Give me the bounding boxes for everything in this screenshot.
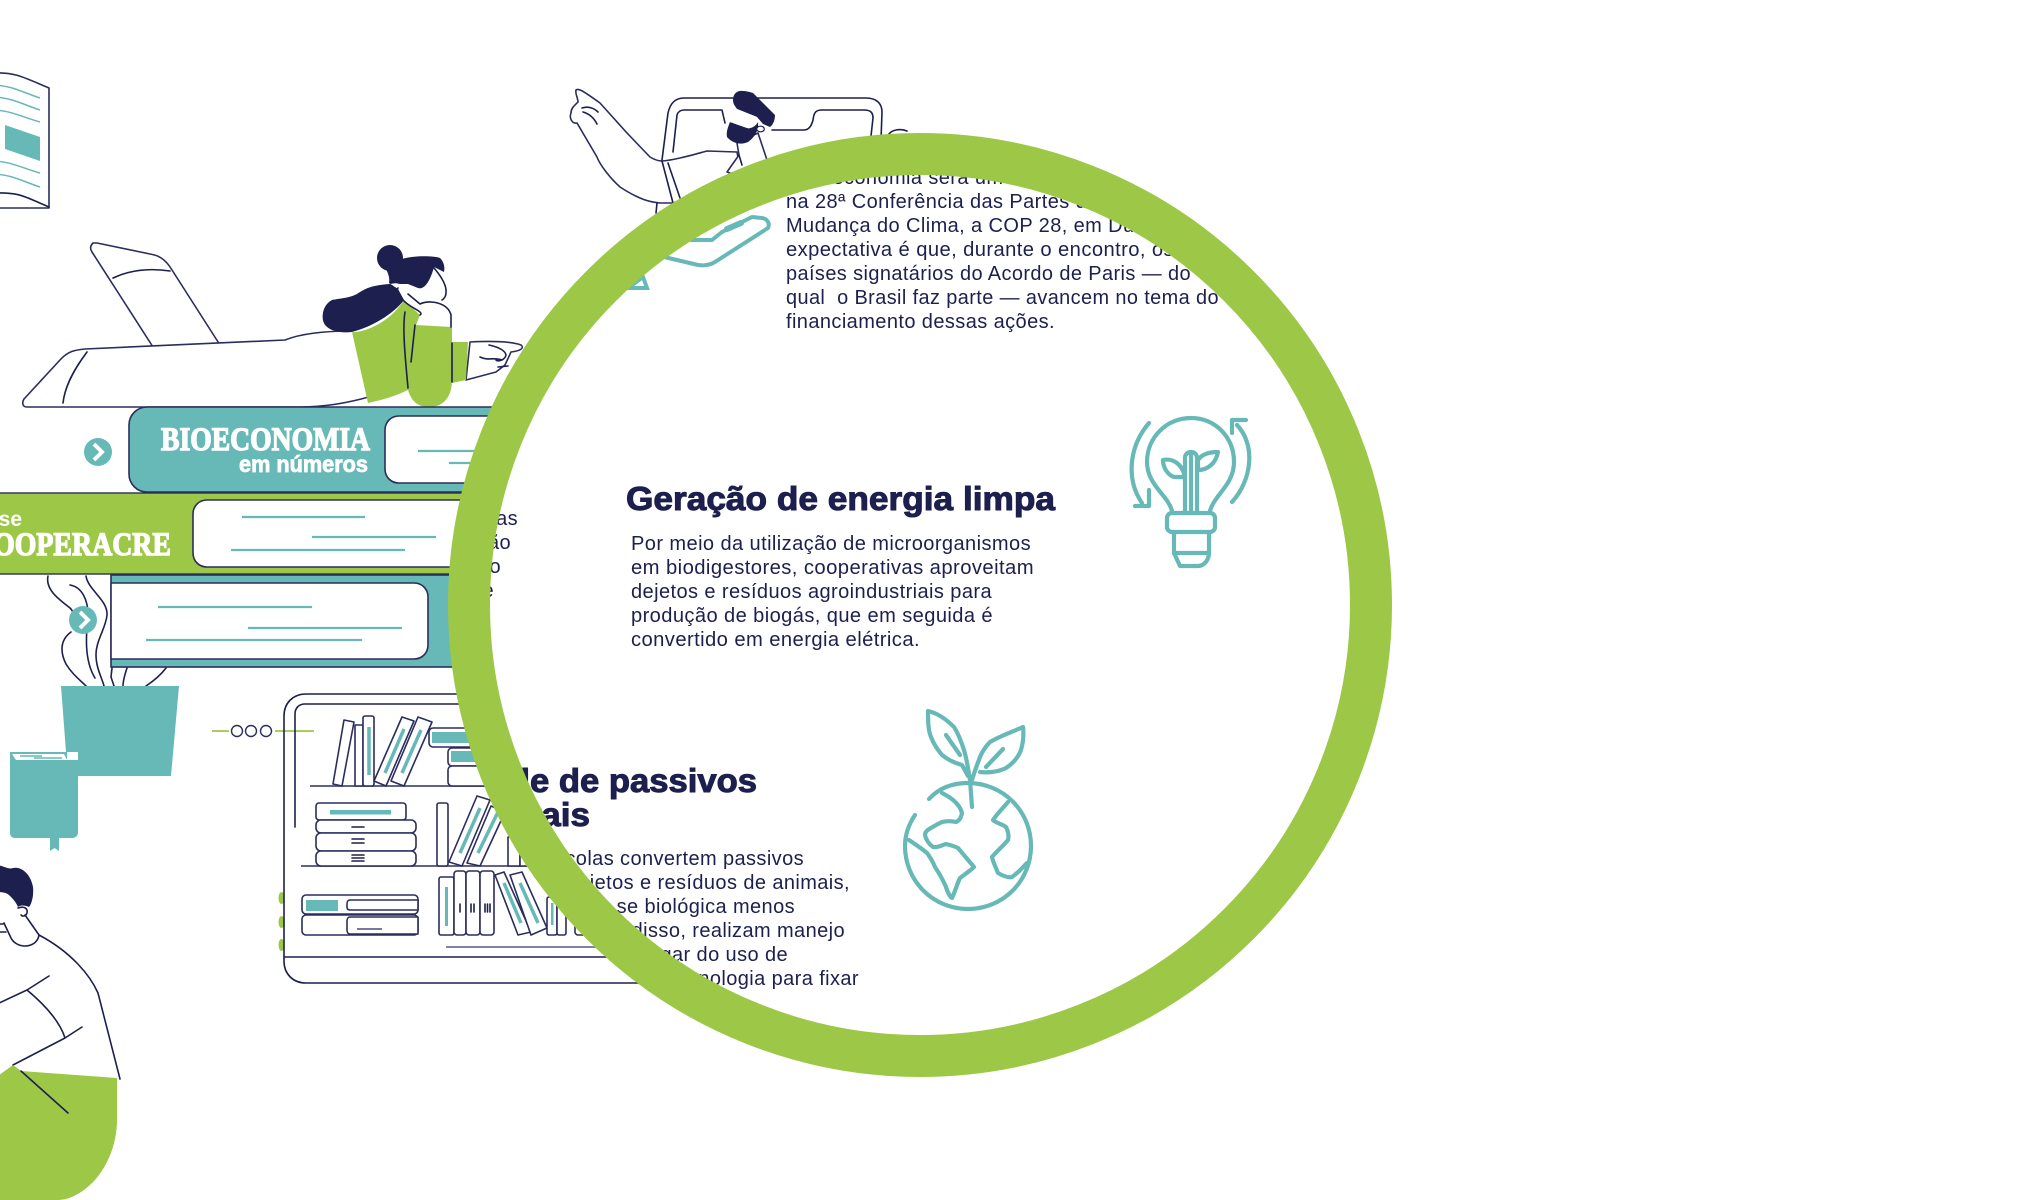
text block: left paragraph fragment: o: [489, 556, 501, 578]
text block: COP 28 paragraph: na 28ª Conferência das Partes d: [786, 191, 1087, 213]
text block: COP 28 paragraph: países signatários do Acordo de Paris — do: [786, 263, 1191, 285]
book subtitle: em números: [239, 451, 368, 477]
man's head: [733, 91, 775, 127]
text block: clean energy paragraph: produção de biogás, que em seguida é: [631, 605, 993, 627]
icon: globe with sprout: [905, 711, 1031, 909]
man's neck: [727, 133, 770, 178]
heading: Geração de energia limpa: Geração de energia limpa: [626, 480, 1056, 517]
man's raised arm: [570, 89, 742, 203]
laptop screen frame: [662, 98, 882, 160]
book title: BIOECONOMIA: [161, 422, 370, 458]
text block: clean energy paragraph: [631, 533, 1034, 651]
text block: left paragraph fragment: as: [496, 508, 518, 530]
text block: left paragraph fragment: e: [482, 580, 494, 602]
text block: COP 28 paragraph: A bioeconomia será um: [786, 167, 1003, 189]
illustration: open book top left: [0, 73, 49, 208]
shelf 3 books: [302, 871, 615, 935]
book spine: Bioeconomia em números: [129, 407, 520, 492]
icon: chevron button 1: [84, 438, 112, 466]
illustration: seated man bottom left: [0, 865, 120, 1200]
heading: Controle de passivos ambientais: [522, 768, 756, 827]
text block: clean energy paragraph: convertido em energia elétrica.: [631, 629, 920, 651]
icon: chevron button 2: [69, 606, 97, 634]
white disc inside the ring: [470, 155, 1370, 1055]
text block: left paragraph fragment: [490, 514, 517, 597]
text block: environmental liabilities paragraph: disso, realizam manejo: [632, 920, 845, 942]
shelf 1 books: [333, 716, 498, 786]
heading: Controle de passivos ambientais: Controle de passivos: [407, 762, 757, 799]
text block: environmental liabilities paragraph: se biológica menos: [617, 896, 795, 918]
shelf 2 books: [316, 796, 530, 866]
connector with three dots: [212, 726, 314, 736]
icon: teal tablet held by the man: [628, 217, 769, 288]
ring: green circle: [469, 154, 1371, 1056]
illustration: bookshelf: [278, 694, 640, 983]
heading: Controle de passivos ambientais: ambientais: [407, 796, 590, 833]
book spine: Case Cooperacre: [0, 493, 520, 574]
man's other hand: [889, 130, 907, 134]
text block: environmental liabilities paragraph: dejetos e resíduos de animais,: [567, 872, 850, 894]
book pages: [111, 583, 428, 659]
text block: clean energy paragraph: Por meio da utilização de microorganismos: [631, 533, 1031, 555]
text block: COP 28 paragraph: [786, 167, 1219, 333]
book pages: [385, 416, 520, 483]
icon: teal plant pot: [61, 686, 179, 776]
illustration: man with laptop at top: [570, 89, 907, 213]
text block: clean energy paragraph: em biodigestores, cooperativas aproveitam: [631, 557, 1034, 579]
book pages: [193, 500, 520, 567]
text block: COP 28 paragraph: qual o Brasil faz parte — avancem no tema do: [786, 287, 1219, 309]
illustration: plant stems: [48, 576, 166, 686]
text block: environmental liabilities paragraph: [565, 848, 859, 990]
illustration: woman lying on the books with laptop: [23, 243, 522, 407]
text block: clean energy paragraph: dejetos e resíduos agroindustriais para: [631, 581, 992, 603]
text block: COP 28 paragraph: Mudança do Clima, a COP 28, em Dubai: [786, 215, 1162, 237]
text block: COP 28 paragraph: financiamento dessas ações.: [786, 311, 1055, 333]
text block: COP 28 paragraph: expectativa é que, durante o encontro, os: [786, 239, 1174, 261]
icon: light bulb with plant and cycle arrows: [1132, 418, 1249, 566]
text block: environmental liabilities paragraph: nologia para fixar: [698, 968, 859, 990]
book spine: bottom teal book: [111, 575, 520, 667]
text block: environmental liabilities paragraph: gar do uso de: [660, 944, 788, 966]
text block: left paragraph fragment: ão: [488, 532, 511, 554]
icon: closed teal book with bookmark: [10, 752, 78, 851]
text block: environmental liabilities paragraph: colas convertem passivos: [565, 848, 804, 870]
